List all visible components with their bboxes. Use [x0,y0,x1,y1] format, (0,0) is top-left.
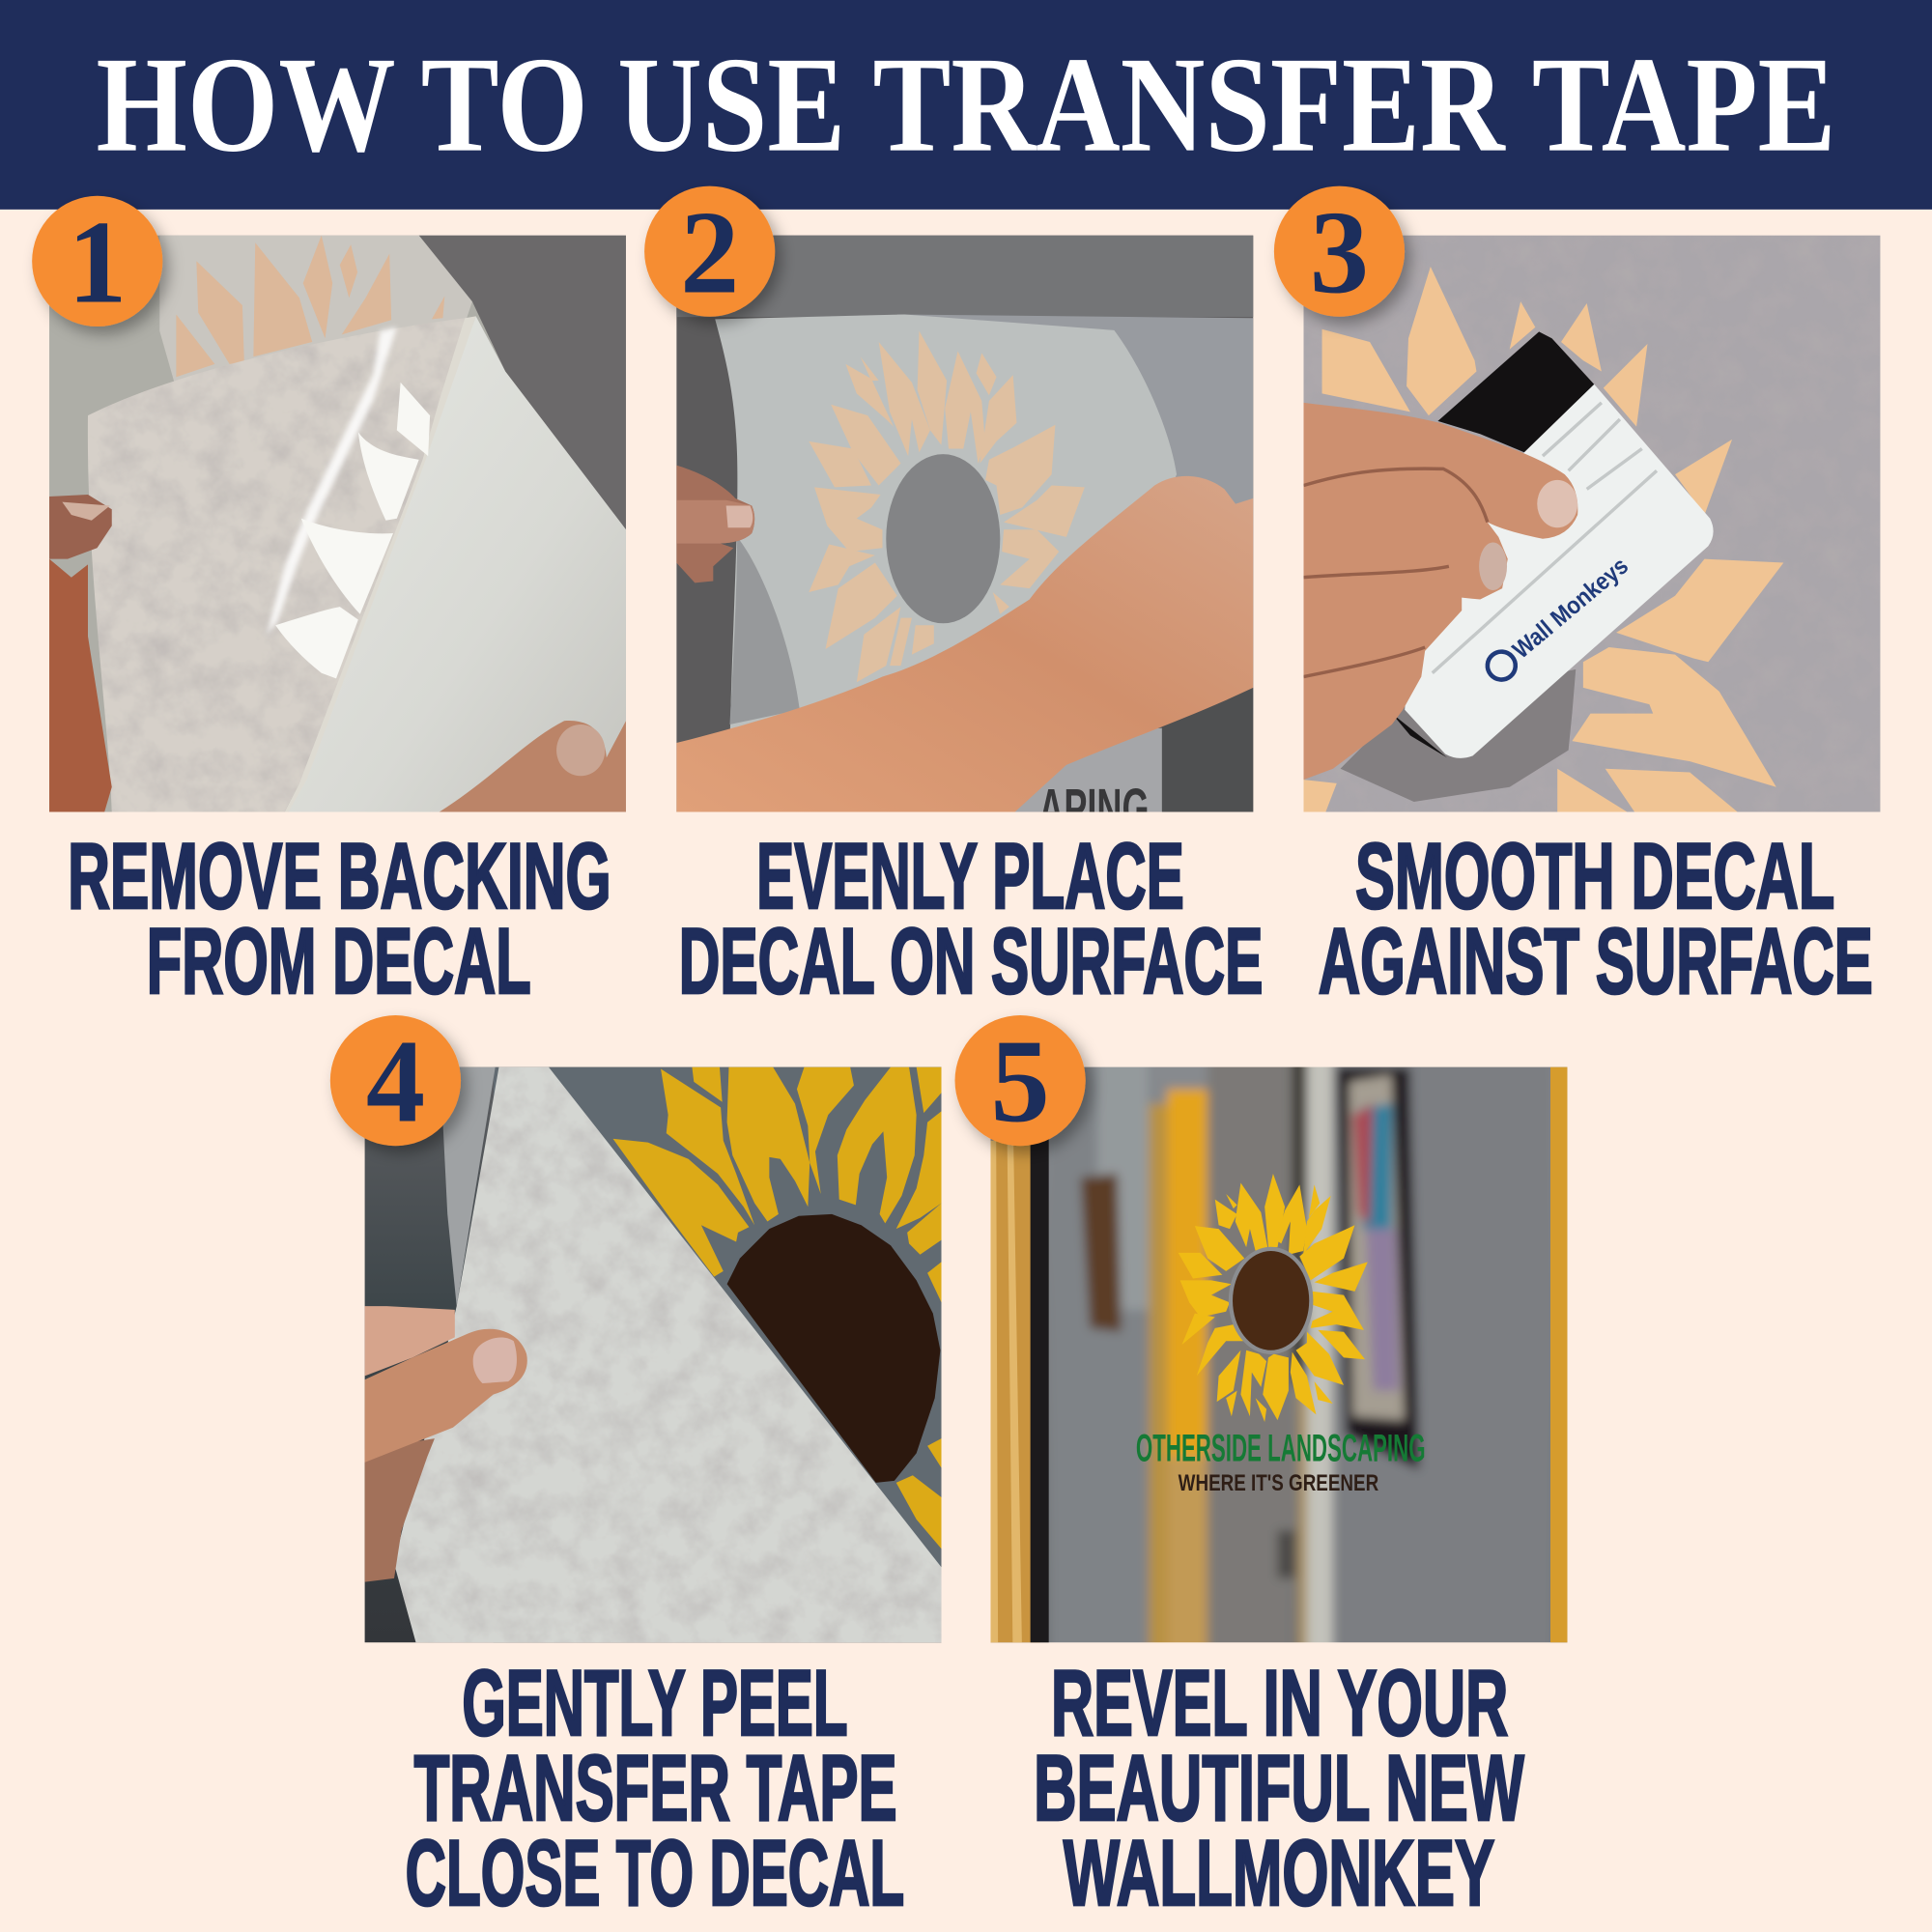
header banner [0,0,1932,210]
badge 4 [330,1015,461,1148]
yellow petals [613,1067,942,1548]
caption 1 [68,825,611,1013]
caption 5: REVEL IN YOUR [1051,1652,1508,1755]
squeegee logo [1486,560,1628,682]
caption 2: DECAL ON SURFACE [679,910,1263,1013]
gloss streak [267,327,397,637]
blurred hallway background [976,1052,1583,1660]
caption 3 [1319,825,1873,1013]
flower center [1233,1251,1309,1350]
left hand [676,466,754,582]
partial lettering: APING [1038,779,1150,840]
right hand [440,721,626,812]
decal tagline: WHERE IT'S GREENER [1179,1470,1379,1496]
fold strip [285,316,476,812]
badge 2: 2 [680,187,739,318]
caption 5: WALLMONKEY [1064,1822,1494,1925]
sunflower petals through tape [176,236,444,377]
flower center [727,1214,940,1483]
caption 4: CLOSE TO DECAL [406,1822,904,1925]
caption 5: BEAUTIFUL NEW [1034,1737,1524,1840]
photo: step 4 gently peel tape [365,1067,942,1644]
badge 5 [955,1015,1086,1148]
white backing [289,316,626,812]
badge 1 [32,196,162,328]
squeegee logo: Wall Monkeys [1508,553,1634,664]
tape with backing removed [88,318,465,812]
caption 1: REMOVE BACKING [68,825,611,928]
arm and fist [676,476,1253,812]
hand [1303,403,1577,780]
caption 5 [1034,1652,1524,1925]
badge 3: 3 [1310,187,1369,318]
caption 4 [406,1652,904,1925]
flower ring [1229,1247,1313,1354]
decal wording: OTHERSIDE LANDSCAPING [1136,1428,1426,1470]
caption 1: FROM DECAL [147,910,531,1013]
caption 2 [679,825,1263,1013]
caption 4: GENTLY PEEL [462,1652,848,1755]
flower center [886,454,1000,623]
caption 4: TRANSFER TAPE [414,1737,897,1840]
white decal shards [275,383,430,678]
wood frame [991,1141,1040,1644]
photo: step 3 smooth decal with squeegee [1303,236,1880,812]
tape sheet [715,314,1177,751]
squeegee body [1405,384,1714,758]
squeegee felt [1392,331,1594,757]
badge 4: 4 [366,1017,425,1148]
photo: step 5 finished decal [976,1052,1583,1660]
badge 5: 5 [991,1017,1050,1148]
dark flower center [1341,669,1576,802]
badge 1: 1 [68,198,127,327]
sunflower petals [1303,267,1783,812]
peeling tape [394,1067,942,1644]
badge 2 [644,186,775,318]
caption 2: EVENLY PLACE [756,825,1184,928]
hand [365,1306,527,1582]
left hand [49,495,112,812]
badge 3 [1274,186,1405,318]
sunflower decal [1179,1174,1368,1422]
sunflower [809,331,1085,682]
photo: step 2 evenly place decal [676,236,1253,840]
photo: step 1 remove backing [49,236,626,812]
